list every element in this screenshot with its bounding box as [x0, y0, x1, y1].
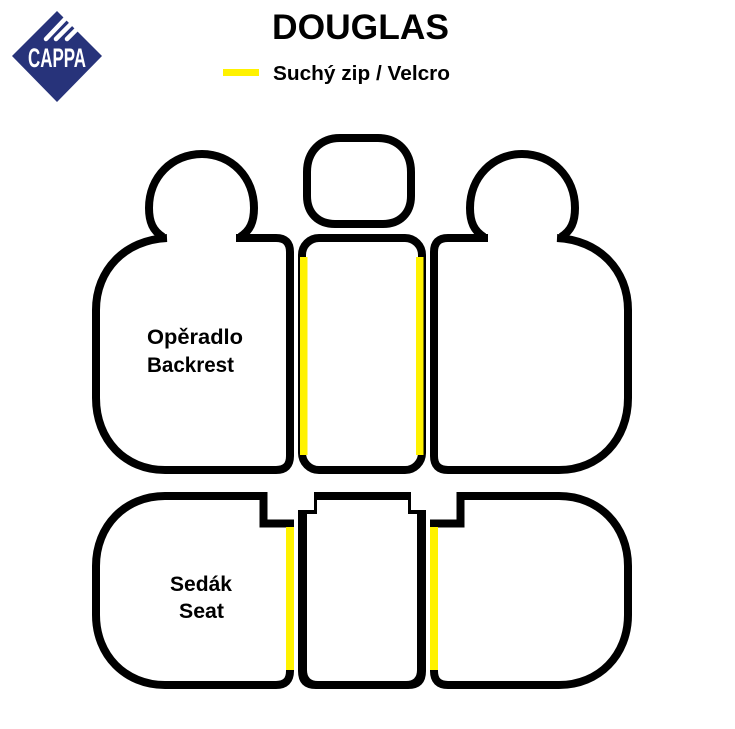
label: backrest [147, 326, 243, 377]
panel: backrest left [96, 154, 290, 470]
label: backrest: Backrest [147, 354, 234, 377]
velcro strip: seat right [430, 527, 438, 670]
velcro strip: centre backrest right [416, 257, 424, 455]
panel: backrest right [434, 154, 628, 470]
logo: CAPPA: CAPPA [28, 43, 86, 73]
label: backrest: Opěradlo [147, 326, 243, 349]
label: seat [170, 573, 232, 623]
panel: centre backrest [300, 238, 424, 470]
panel: headrest [307, 138, 411, 224]
label: seat: Seat [179, 600, 224, 623]
panel: seat right [430, 496, 628, 685]
velcro strip: centre backrest left [300, 257, 308, 455]
panel: seat left [96, 496, 294, 685]
panel: centre seat [298, 492, 426, 689]
logo: CAPPA [12, 11, 102, 102]
legend: velcro: Suchý zip / Velcro [273, 63, 450, 85]
velcro strip: seat left [286, 527, 294, 670]
title: DOUGLAS [272, 8, 449, 47]
label: seat: Sedák [170, 573, 232, 596]
